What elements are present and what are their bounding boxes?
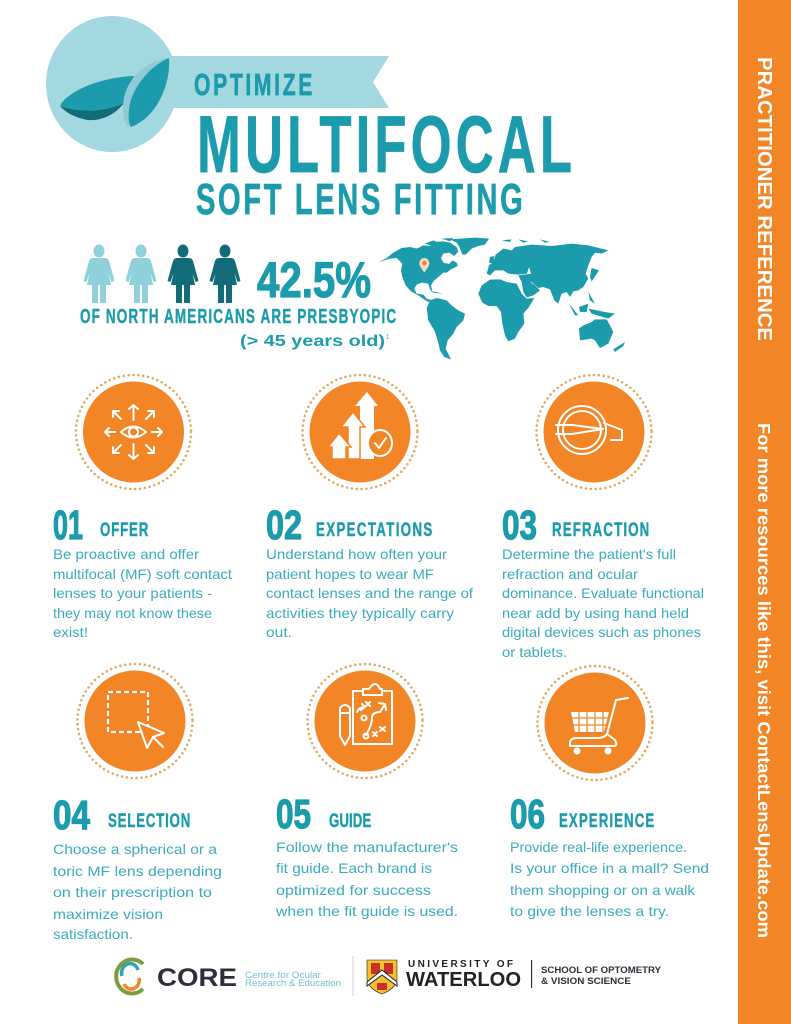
icon: clipboard and pencil (308, 664, 422, 778)
title line: multifocal: MULTIFOCAL (197, 100, 572, 190)
footer logos (116, 956, 662, 996)
step heading: GUIDE (329, 809, 371, 832)
step text: to give the lenses a try. (510, 903, 669, 919)
step text: Determine the patient's full (502, 546, 676, 562)
logo: school of optometry: SCHOOL OF OPTOMETRY (541, 965, 662, 976)
step text: activities they typically carry (266, 605, 454, 621)
caption: north americans: OF NORTH AMERICANS ARE PRESBYOPIC (80, 304, 396, 328)
step text: or tablets. (502, 644, 567, 660)
step text: Be proactive and offer (53, 546, 199, 562)
logo: CORE: CORE (157, 964, 237, 992)
logo: CORE: Centre for Ocular (245, 970, 321, 981)
step text: contact lenses and the range of (266, 585, 473, 601)
step text: Follow the manufacturer's (276, 839, 458, 855)
step text: on their prescription to (53, 884, 212, 900)
step text: Understand how often your (266, 546, 447, 562)
step text: satisfaction. (53, 926, 133, 942)
step heading: OFFER (100, 518, 148, 541)
logo: CORE: Research & Education (245, 978, 341, 989)
header badge with contact lenses (46, 16, 389, 152)
logo: school of optometry (541, 965, 662, 987)
icon: rising arrows with check (302, 375, 418, 489)
step text: patient hopes to wear MF (266, 566, 434, 582)
step heading: EXPECTATIONS (316, 518, 432, 541)
step text: refraction and ocular (502, 566, 638, 582)
step text: toric MF lens depending (53, 863, 222, 879)
logo: Waterloo wordmark (406, 959, 521, 991)
icon: dashed selection with cursor (78, 664, 192, 778)
step text: they may not know these (53, 605, 212, 621)
world map (379, 238, 625, 359)
icon: map pin (419, 258, 429, 273)
title line: optimize: OPTIMIZE (194, 67, 312, 102)
panel: 05 guide (275, 664, 458, 919)
step text: them shopping or on a walk (510, 882, 696, 898)
step number: 02 (266, 502, 302, 548)
step heading: SELECTION (108, 809, 190, 832)
step text (53, 546, 232, 640)
step text (510, 839, 709, 919)
icon: lens lying flat (60, 76, 134, 120)
step text: Provide real-life experience. (510, 839, 687, 855)
icon: four people (84, 244, 240, 303)
step text: Is your office in a mall? Send (510, 860, 709, 876)
step text: digital devices such as phones (502, 624, 701, 640)
step text: lenses to your patients - (53, 585, 212, 601)
panel: 06 experience (510, 666, 709, 919)
step number: 05 (276, 791, 311, 837)
sidebar resources link: For more resources like this, visit ContactLensUpdate.com (754, 423, 774, 938)
step number: 01 (53, 502, 83, 548)
step text: exist! (53, 624, 88, 640)
panel: 03 refraction (502, 375, 704, 660)
step text: optimized for success (276, 882, 431, 898)
icon: shopping cart (538, 666, 652, 780)
step number: 04 (53, 792, 90, 838)
step text: fit guide. Each brand is (276, 860, 432, 876)
title (194, 67, 572, 223)
logo: CORE (116, 960, 341, 994)
step text: dominance. Evaluate functional (502, 585, 704, 601)
logo: Waterloo wordmark: UNIVERSITY OF (408, 959, 513, 970)
step heading: EXPERIENCE (559, 809, 654, 832)
icon: eye cross-section (536, 375, 652, 489)
step text: maximize vision (53, 906, 163, 922)
panel: 02 expectations (266, 375, 473, 640)
step text: Choose a spherical or a (53, 841, 217, 857)
caption: age: (> 45 years old) (240, 333, 385, 350)
step number: 06 (510, 791, 545, 837)
title line: soft lens fitting: SOFT LENS FITTING (196, 174, 523, 223)
step number: 03 (502, 502, 537, 548)
logo: Waterloo wordmark: WATERLOO (406, 969, 521, 991)
step heading: REFRACTION (552, 518, 649, 541)
footnote marker: 1 (386, 335, 390, 341)
logo: University of Waterloo crest (367, 960, 397, 994)
icon: lens upright (123, 58, 169, 127)
step text: out. (266, 624, 292, 640)
panel: 04 selection (53, 664, 222, 942)
step text: multifocal (MF) soft contact (53, 566, 232, 582)
sidebar (738, 0, 791, 1024)
step text (502, 546, 704, 660)
step text (266, 546, 473, 640)
step text: when the fit guide is used. (275, 903, 458, 919)
step text (275, 839, 458, 919)
sidebar heading: PRACTITIONER REFERENCE (753, 57, 775, 341)
step text: near add by using hand held (502, 605, 689, 621)
icon: eye with radiating arrows (76, 375, 191, 489)
statistic: presbyopia figures (80, 244, 396, 350)
logo: school of optometry: & VISION SCIENCE (541, 976, 631, 987)
step text (53, 841, 222, 942)
figure: 42.5%: 42.5% (257, 252, 371, 308)
panel: 01 offer (53, 375, 232, 640)
